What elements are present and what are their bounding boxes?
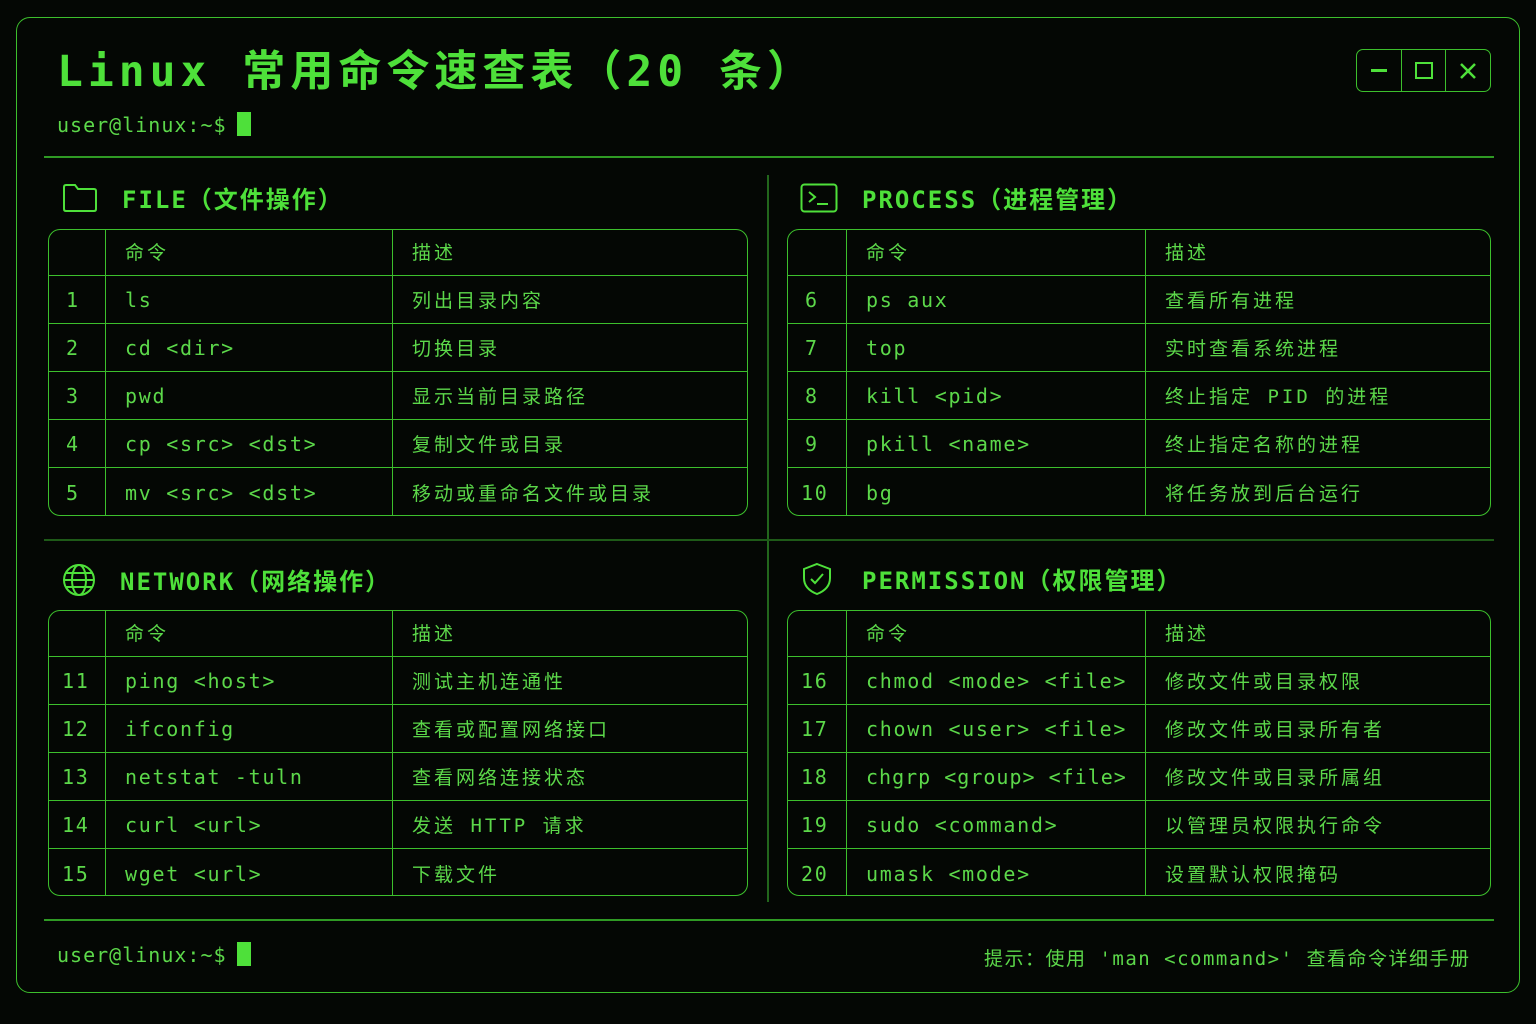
table: PROCESS: pkill <name> [866,432,1031,456]
table: PROCESS: 命令 [866,242,910,264]
table: PROCESS: 10 [801,480,828,504]
table: PERMISSION: 命令 [866,623,910,645]
table: PROCESS: 7 [805,336,819,360]
table: NETWORK [48,610,748,896]
table: NETWORK: ifconfig [125,717,235,741]
table: FILE: 3 [66,384,80,408]
heading: PERMISSION: PERMISSION（权限管理） [862,567,1182,595]
table: NETWORK: 下载文件 [412,864,500,886]
heading: NETWORK: NETWORK（网络操作） [120,568,391,596]
table: NETWORK: 描述 [412,623,456,645]
table: PROCESS: bg [866,480,893,504]
table: PROCESS: ps aux [866,288,948,312]
table: FILE: 复制文件或目录 [412,434,566,456]
table: PROCESS: 查看所有进程 [1165,290,1297,312]
top prompt: user@linux:~$ [57,113,227,137]
table: PERMISSION: 修改文件或目录所有者 [1165,719,1385,741]
table: PERMISSION: chgrp <group> <file> [866,765,1127,789]
table: FILE: cp <src> <dst> [125,432,317,456]
table: FILE: ls [125,288,152,312]
title: Linux 常用命令速查表（20 条） [57,47,815,97]
table: NETWORK: 测试主机连通性 [412,671,566,693]
table: PROCESS: 实时查看系统进程 [1165,338,1341,360]
table: NETWORK: ping <host> [125,669,276,693]
table: FILE: 2 [66,336,80,360]
tip text: 提示：使用 'man <command>' 查看命令详细手册 [984,948,1470,970]
table: FILE: 列出目录内容 [412,290,544,312]
table: PERMISSION: sudo <command> [866,813,1058,837]
table: FILE: pwd [125,384,166,408]
table: PERMISSION: 修改文件或目录权限 [1165,671,1363,693]
table: NETWORK: 14 [62,813,89,837]
table: NETWORK: curl <url> [125,813,262,837]
table: FILE: 切换目录 [412,338,500,360]
table: NETWORK: 查看网络连接状态 [412,767,588,789]
table: NETWORK: wget <url> [125,862,262,886]
table: PERMISSION: 17 [801,717,828,741]
table: FILE: 1 [66,288,80,312]
table: PROCESS: 9 [805,432,819,456]
table: NETWORK: 12 [62,717,89,741]
table: PROCESS: 终止指定名称的进程 [1165,434,1363,456]
table: PERMISSION: 19 [801,813,828,837]
table: PERMISSION: 20 [801,862,828,886]
table: FILE: 移动或重命名文件或目录 [412,482,654,504]
table: PERMISSION: 18 [801,765,828,789]
table: FILE: mv <src> <dst> [125,480,317,504]
table: PERMISSION: 以管理员权限执行命令 [1165,815,1385,837]
table: PROCESS: 8 [805,384,819,408]
table: PERMISSION: 16 [801,669,828,693]
table: PERMISSION: 描述 [1165,623,1209,645]
table: PERMISSION [787,610,1491,896]
table: NETWORK: 11 [62,669,89,693]
table: PROCESS: kill <pid> [866,384,1003,408]
table: FILE: 5 [66,480,80,504]
table: NETWORK: 查看或配置网络接口 [412,719,610,741]
heading: FILE: FILE（文件操作） [122,186,344,214]
table: PROCESS: 描述 [1165,242,1209,264]
table: PROCESS: top [866,336,907,360]
table: NETWORK: netstat -tuln [125,765,304,789]
table: PERMISSION: 设置默认权限掩码 [1165,864,1341,886]
table: PROCESS: 终止指定 PID 的进程 [1165,386,1391,408]
table: PROCESS [787,229,1491,516]
table: FILE: 4 [66,432,80,456]
table: NETWORK: 命令 [125,623,169,645]
window controls [1356,49,1491,92]
table: FILE: 命令 [125,242,169,264]
table: FILE: cd <dir> [125,336,235,360]
table: NETWORK: 15 [62,862,89,886]
table: PERMISSION: umask <mode> [866,862,1031,886]
table: PERMISSION: chown <user> <file> [866,717,1127,741]
table: NETWORK: 发送 HTTP 请求 [412,815,587,837]
table: FILE: 描述 [412,242,456,264]
table: PROCESS: 将任务放到后台运行 [1165,482,1363,504]
heading: PROCESS: PROCESS（进程管理） [862,186,1133,214]
table: FILE [48,229,748,516]
table: PROCESS: 6 [805,288,819,312]
table: FILE: 显示当前目录路径 [412,386,588,408]
table: PERMISSION: chmod <mode> <file> [866,669,1127,693]
bottom prompt: user@linux:~$ [57,943,227,967]
table: NETWORK: 13 [62,765,89,789]
table: PERMISSION: 修改文件或目录所属组 [1165,767,1385,789]
